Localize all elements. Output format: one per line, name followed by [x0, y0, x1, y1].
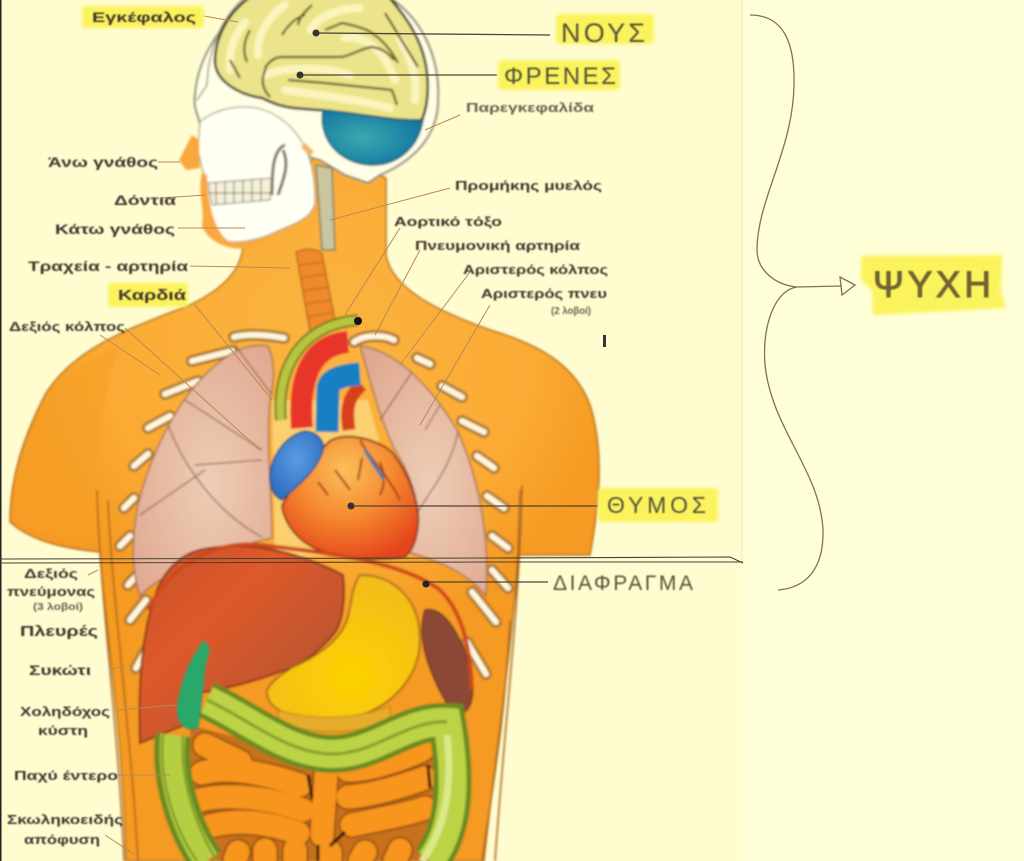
heart: [282, 437, 418, 559]
printed labels: Δόντια: [114, 192, 177, 208]
side body contours: [97, 485, 522, 861]
highlights: [82, 6, 1006, 522]
right lung (viewer left): [133, 345, 274, 596]
printed labels: πνεύμονας: [7, 584, 95, 599]
printed labels: (2 λοβοί): [551, 306, 591, 317]
torso: [10, 150, 599, 861]
leader lines: [88, 16, 598, 855]
printed labels: Παρεγκεφαλίδα: [466, 100, 594, 115]
spinal cord: [316, 165, 335, 250]
printed labels: Δεξιός κόλπος: [9, 319, 125, 334]
printed labels: Δεξιός: [24, 566, 78, 581]
printed labels: Πνευμονική αρτηρία: [415, 238, 580, 253]
printed labels: Εγκέφαλος: [92, 9, 196, 25]
diaphragm band: [148, 544, 472, 690]
head shell: [195, 0, 438, 183]
handwritten labels: ΨΥΧΗ: [873, 264, 991, 305]
liver: [140, 546, 344, 743]
handwritten labels: ΘΥΜΟΣ: [607, 492, 706, 518]
printed labels: Παχύ έντερο: [14, 768, 118, 783]
trachea: [296, 249, 336, 332]
teeth: [208, 178, 272, 205]
printed labels: Χοληδόχος: [20, 704, 110, 719]
printed labels: Καρδιά: [118, 287, 187, 304]
arrow to ΨΥΧΗ: [797, 277, 855, 295]
printed labels: Άνω γνάθος: [48, 154, 158, 170]
pancreas: [277, 706, 390, 732]
printed labels: [7, 9, 608, 847]
printed labels: απόφυση: [24, 832, 100, 847]
lung fissures: [140, 345, 458, 537]
horizontal fold line: [0, 557, 743, 563]
aortic arch (green): [280, 320, 358, 420]
large intestine: [162, 700, 453, 861]
stomach: [267, 575, 420, 720]
stray mark: [603, 335, 606, 347]
jaw hinge: [272, 145, 286, 195]
pulmonary artery (red): [301, 342, 348, 428]
coronary vessels: [318, 440, 400, 500]
left lung (viewer right): [360, 346, 487, 596]
nose and jaw flesh: [179, 135, 272, 249]
printed labels: κύστη: [38, 723, 88, 738]
gyri highlights: [230, 5, 416, 108]
printed labels: Σκωληκοειδής: [7, 812, 123, 827]
printed labels: Αριστερός κόλπος: [463, 262, 608, 277]
spleen: [422, 610, 473, 713]
handwritten labels: ΦΡΕΝΕΣ: [504, 63, 616, 90]
printed labels: Τραχεία - αρτηρία: [28, 258, 189, 274]
printed labels: Προμήκης μυελός: [455, 178, 602, 193]
handwritten labels: ΔΙΑΦΡΑΓΜΑ: [553, 572, 693, 595]
printed labels: Πλευρές: [20, 623, 98, 640]
printed labels: Αορτικό τόξο: [394, 214, 502, 229]
small intestine: [190, 725, 445, 861]
cerebrum: [215, 0, 428, 120]
ribs: [120, 335, 508, 674]
cerebellum: [322, 110, 423, 165]
anatomy illustration: [10, 0, 599, 861]
handwritten labels: [504, 18, 991, 595]
skull / face: [198, 107, 315, 242]
printed labels: Αριστερός πνευ: [481, 286, 608, 301]
chest cavity: [272, 400, 410, 556]
shaded arms and chest tint: [15, 345, 120, 540]
printed labels: Συκώτι: [29, 662, 91, 678]
intestine gaps: [195, 765, 430, 861]
right atrium: [270, 431, 323, 500]
printed labels: (3 λοβοί): [33, 602, 83, 613]
printed labels: Κάτω γνάθος: [55, 221, 175, 237]
curly brace: [750, 15, 823, 590]
vena cava (blue): [327, 374, 360, 432]
handwritten labels: ΝΟΥΣ: [561, 18, 645, 48]
sulci: [230, 5, 418, 105]
gall bladder: [177, 640, 210, 729]
